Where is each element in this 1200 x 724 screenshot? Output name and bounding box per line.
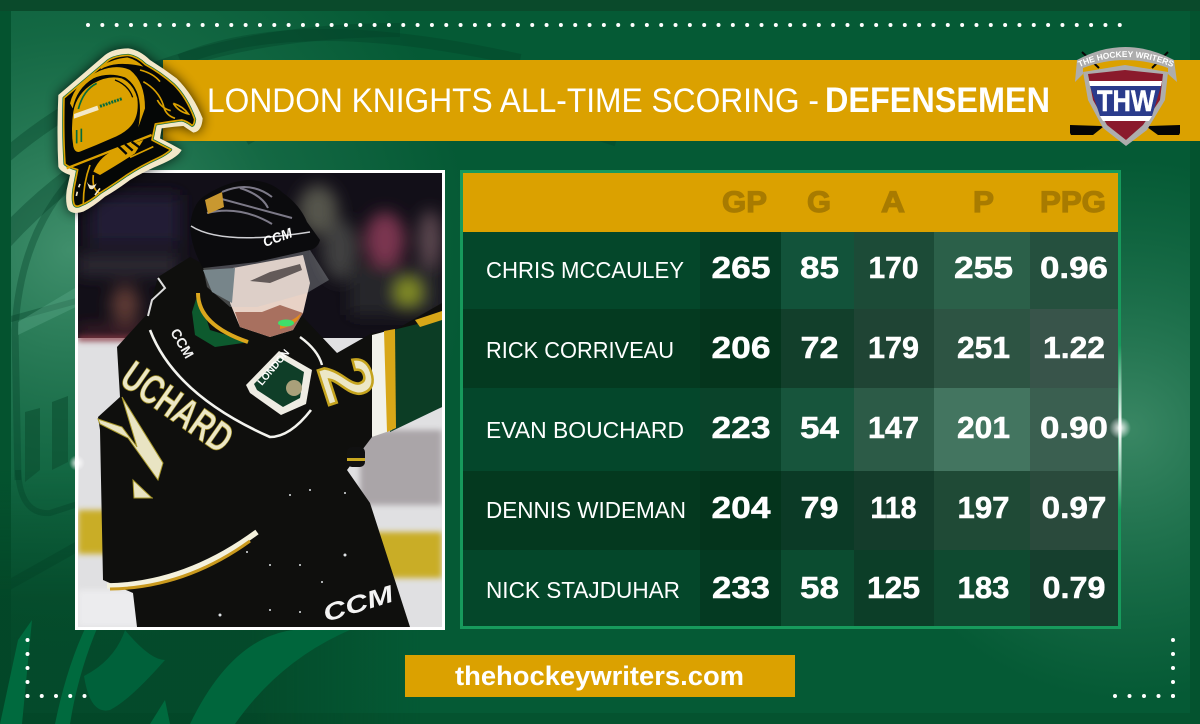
player photo: CCM — [320, 580, 398, 628]
stat values: 147 — [868, 410, 919, 445]
player names: RICK CORRIVEAU — [486, 337, 674, 363]
stat values: 1.22 — [1043, 330, 1105, 365]
stat values: 197 — [958, 490, 1010, 525]
stat values: 0.90 — [1040, 410, 1108, 445]
stat values: 54 — [800, 410, 840, 445]
footer website bar — [405, 655, 795, 697]
stat values: 72 — [800, 330, 838, 365]
stat values: 179 — [868, 330, 919, 365]
player photo: CCM — [167, 326, 197, 361]
title text: DEFENSEMEN — [825, 81, 1050, 120]
shield monogram: THW — [1097, 85, 1156, 118]
stat values: 85 — [800, 250, 839, 285]
table header: GP — [722, 186, 767, 219]
name on jersey: UCHARD — [113, 352, 242, 462]
table header: G — [807, 186, 831, 219]
banner text: THE HOCKEY WRITERS — [1077, 51, 1174, 66]
stat values: 255 — [954, 250, 1013, 285]
title text: LONDON KNIGHTS ALL-TIME SCORING - — [207, 82, 819, 120]
plume lines — [143, 82, 175, 118]
table header: A — [881, 186, 905, 219]
table header: PPG — [1040, 186, 1106, 219]
stat values: 204 — [712, 490, 771, 525]
stat values: 223 — [712, 410, 770, 445]
table header — [463, 173, 1118, 232]
stat values: 58 — [800, 570, 839, 605]
stat values: 265 — [712, 250, 770, 285]
jersey piping — [150, 330, 311, 437]
stat values: 125 — [867, 570, 920, 605]
glove — [350, 448, 365, 467]
stats table — [460, 170, 1121, 629]
crossed hockey sticks — [1070, 52, 1180, 135]
skin and visor — [230, 255, 310, 337]
player names: CHRIS MCCAULEY — [486, 257, 684, 283]
player names: NICK STAJDUHAR — [486, 577, 680, 603]
curved banner — [1075, 47, 1177, 82]
stat values: 170 — [868, 250, 918, 285]
helmet dome — [72, 77, 138, 152]
stat values: 206 — [712, 330, 770, 365]
stat values: 118 — [870, 490, 916, 525]
stat values: 0.79 — [1042, 570, 1106, 605]
stat values: 0.97 — [1042, 490, 1106, 525]
speckles — [218, 489, 346, 616]
CCM marks: CCM — [261, 224, 295, 250]
footer website bar: thehockeywriters.com — [455, 661, 744, 691]
back number — [98, 397, 163, 480]
visor slit — [74, 106, 99, 119]
chin — [93, 140, 143, 175]
stat values: 79 — [800, 490, 838, 525]
stat values: 251 — [957, 330, 1010, 365]
player names: EVAN BOUCHARD — [486, 417, 684, 443]
player names — [486, 257, 686, 603]
jersey — [98, 257, 442, 627]
table header: P — [973, 186, 994, 219]
title banner — [163, 60, 1200, 141]
cell shading — [463, 232, 1118, 626]
shield — [1083, 65, 1168, 146]
stat values: 0.96 — [1040, 250, 1108, 285]
upper gold band — [70, 67, 145, 127]
team logo: knight helmet — [57, 48, 203, 213]
stat values: 201 — [957, 410, 1010, 445]
stat values — [712, 250, 1108, 605]
stat values: 183 — [958, 570, 1010, 605]
helmet — [190, 180, 320, 268]
THW logo — [1070, 47, 1180, 146]
shoulder number: 2 — [302, 348, 391, 413]
team crest — [246, 351, 312, 415]
stat values: 233 — [712, 570, 770, 605]
player photo: LONDON — [256, 348, 292, 388]
light flares — [69, 345, 1131, 520]
player names: DENNIS WIDEMAN — [486, 497, 686, 523]
player photo — [75, 170, 445, 630]
